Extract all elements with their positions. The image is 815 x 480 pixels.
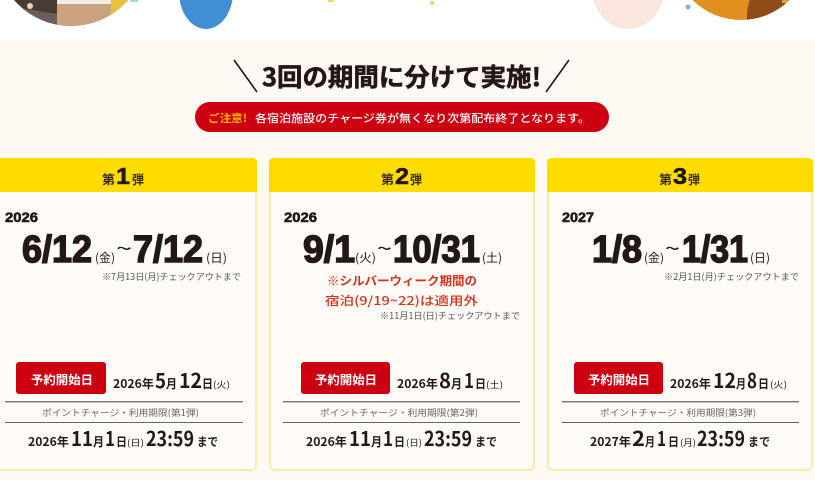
reservation start date [113, 365, 230, 394]
year: 2026 [284, 209, 317, 225]
reservation start date [397, 365, 503, 394]
point charge period: 月 [371, 433, 382, 450]
header: phase 3: 第 [659, 169, 672, 188]
decoration: confetti [130, 0, 690, 10]
date range: (金) [95, 249, 115, 266]
header: phase 3 [547, 158, 813, 192]
decoration: blue ellipse [179, 0, 233, 29]
notice pill [195, 102, 609, 132]
point charge period: 11 [349, 423, 371, 452]
date range: 1/31 [682, 229, 748, 271]
header: phase 2: 2 [395, 163, 409, 189]
point charge period: 1 [105, 423, 115, 452]
point charge period: 2026年 [306, 433, 347, 450]
date range: (土) [482, 249, 502, 266]
year: 2027 [562, 209, 594, 225]
date range: (金) [644, 249, 664, 266]
header: phase 1: 第 [102, 169, 115, 188]
reservation start date: 日 [758, 375, 769, 392]
checkout note: ※7月13日(月)チェックアウトまで [102, 270, 241, 283]
reservation start date: (火) [770, 378, 787, 391]
panel: phase 1 [0, 158, 257, 470]
date range: 10/31 [393, 229, 480, 271]
reservation start date: 2026年 [397, 375, 438, 392]
silver week warning: 宿泊(9/19~22)は適用外 [325, 292, 478, 309]
notice pill: 各宿泊施設のチャージ券が無くなり次第配布終了となります。 [255, 110, 590, 126]
reservation start date: 5 [155, 365, 166, 394]
header: phase 1: 弾 [132, 169, 144, 188]
date range: 9/1 [303, 229, 355, 271]
date range: (火) [355, 249, 376, 266]
point charge period: ポイントチャージ・利用期限(第2弾) [320, 406, 478, 419]
point charge period [283, 401, 520, 452]
photo: food circle right [692, 0, 790, 20]
point charge period: 2026年 [28, 433, 69, 450]
reservation start date: 2026年 [670, 375, 711, 392]
point charge period: ポイントチャージ・利用期限(第3弾) [600, 406, 756, 419]
title: 3回の期間に分けて実施! [262, 58, 541, 94]
point charge period: まで [475, 433, 497, 450]
point charge period: (日) [406, 436, 422, 449]
point charge period: まで [197, 433, 218, 450]
date range: ~ [377, 235, 392, 261]
point charge period: 23:59 [424, 423, 472, 452]
checkout note: ※2月1日(月)チェックアウトまで [664, 270, 799, 283]
reservation start button: 予約開始日 [588, 371, 650, 388]
date range: 6/12 [22, 229, 92, 271]
header: phase 2: 第 [381, 169, 394, 188]
point charge period [5, 401, 243, 452]
reservation start button [574, 362, 663, 394]
header: phase 3: 3 [673, 163, 687, 189]
point charge period: (日) [127, 436, 144, 449]
point charge period: 日 [668, 433, 679, 450]
reservation start date: 12 [713, 365, 736, 394]
decoration: pink ellipse [592, 0, 664, 29]
photo: drink circle left [14, 0, 128, 26]
reservation start date: 12 [179, 365, 202, 394]
point charge period: 日 [116, 433, 127, 450]
point charge period: まで [748, 433, 770, 450]
point charge period: ポイントチャージ・利用期限(第1弾) [42, 406, 199, 419]
reservation start button: 予約開始日 [315, 371, 377, 388]
header: phase 1 [0, 158, 257, 192]
point charge period [562, 401, 799, 452]
point charge period: 2027年 [590, 433, 631, 450]
reservation start date: 2026年 [113, 375, 154, 392]
date range: ~ [665, 235, 680, 261]
reservation start date: 月 [166, 375, 177, 392]
header: phase 1: 1 [116, 163, 130, 189]
reservation start date: 月 [736, 375, 746, 392]
date range [592, 229, 770, 271]
reservation start date: (土) [486, 378, 503, 391]
reservation start date: 8 [439, 365, 451, 394]
date range: ~ [116, 235, 132, 261]
point charge period: 1 [657, 423, 666, 452]
reservation start date: 日 [475, 375, 486, 392]
header: phase 2: 弾 [410, 169, 422, 188]
point charge period: 11 [71, 423, 93, 452]
panel: phase 2 [269, 158, 535, 470]
date range: 7/12 [133, 229, 203, 271]
point charge period: 23:59 [146, 423, 194, 452]
notice pill: ご注意! [208, 110, 247, 126]
reservation start button [301, 362, 390, 394]
checkout note: ※11月1日(日)チェックアウトまで [380, 309, 520, 322]
reservation start button: 予約開始日 [31, 371, 93, 388]
silver week warning: ※シルバーウィーク期間の [327, 272, 477, 289]
point charge period: 2 [632, 423, 645, 452]
point charge period: 23:59 [697, 423, 745, 452]
reservation start date: (火) [213, 378, 230, 391]
date range: (日) [750, 249, 770, 266]
date range [22, 229, 227, 271]
silver week warning [325, 272, 478, 309]
header: phase 3: 弾 [688, 169, 700, 188]
point charge period: 日 [394, 433, 405, 450]
reservation start date: 日 [202, 375, 213, 392]
top decorations [0, 0, 802, 30]
point charge period: 1 [383, 423, 393, 452]
panel: phase 3 [547, 158, 813, 470]
header: phase 2 [269, 158, 535, 192]
reservation start button [16, 362, 106, 394]
year: 2026 [5, 209, 38, 225]
date range: (日) [206, 249, 227, 266]
reservation start date: 1 [464, 365, 474, 394]
reservation start date: 月 [451, 375, 462, 392]
point charge period: 月 [93, 433, 104, 450]
reservation start date [670, 365, 787, 394]
reservation start date: 8 [747, 365, 757, 394]
date range [303, 229, 502, 271]
point charge period: (月) [680, 436, 696, 449]
point charge period: 月 [645, 433, 655, 450]
date range: 1/8 [592, 229, 642, 271]
